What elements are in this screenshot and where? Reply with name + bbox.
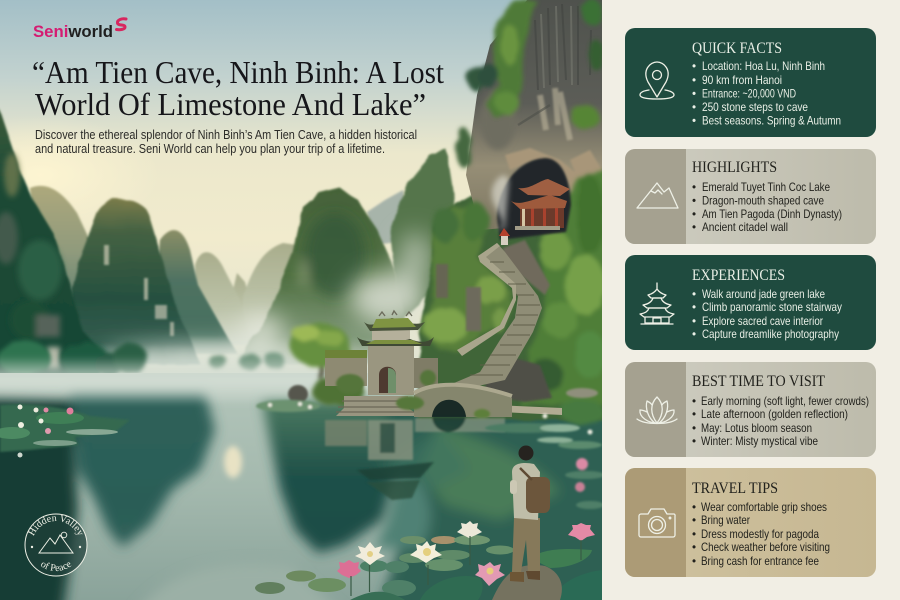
list: experiences: •	[692, 328, 696, 341]
list: quick facts	[692, 60, 841, 128]
list: best time to visit: •	[692, 395, 696, 408]
small shrine and smoke	[492, 175, 510, 245]
panel: best time to visit	[625, 362, 876, 457]
list: experiences: Explore sacred cave interior	[702, 315, 823, 328]
list: highlights: Dragon-mouth shaped cave	[702, 194, 824, 208]
winding stone stairway	[447, 243, 542, 386]
list: best time to visit: •	[692, 435, 696, 448]
list: travel tips: Dress modestly for pagoda	[701, 528, 819, 541]
list: travel tips: •	[692, 514, 696, 527]
list: quick facts: Entrance: ~20,000 VND	[702, 88, 796, 100]
list: best time to visit: •	[692, 408, 696, 421]
icon: camera	[639, 509, 675, 537]
list: highlights: •	[692, 221, 696, 234]
lake surface	[0, 373, 418, 600]
list: quick facts: 250 stone steps to cave	[702, 101, 808, 114]
list: travel tips: •	[692, 541, 696, 554]
heading: travel tips: TRAVEL TIPS	[692, 480, 778, 497]
shore foliage and tree left of gate	[290, 323, 364, 406]
list: experiences	[692, 288, 842, 341]
rock and lily pads near gate	[256, 385, 320, 412]
shore trees	[0, 340, 284, 378]
list: quick facts: •	[692, 114, 696, 128]
large foreground leaves	[350, 570, 602, 600]
panel: travel tips	[625, 468, 876, 577]
valley mist	[105, 232, 431, 371]
lotus flowers	[337, 521, 595, 596]
heading: best time to visit: BEST TIME TO VISIT	[692, 373, 825, 390]
list: highlights	[692, 181, 842, 234]
panel: highlights	[625, 149, 876, 244]
ancient citadel gate	[357, 311, 434, 395]
icon: mountains	[637, 183, 678, 208]
mirrored bridge and gate	[325, 417, 505, 500]
list: experiences: •	[692, 315, 696, 328]
mountain shading	[300, 213, 365, 297]
list: highlights: Am Tien Pagoda (Dinh Dynasty)	[702, 208, 842, 221]
next mountain	[150, 230, 238, 354]
list: experiences: Climb panoramic stone stairway	[702, 301, 842, 314]
main karst peak	[70, 199, 200, 364]
title line two: World Of Limestone And Lake”	[35, 86, 426, 122]
behind-right mountain	[390, 150, 455, 320]
list: best time to visit: Winter: Misty mystical vibe	[701, 435, 818, 448]
heading: highlights: HIGHLIGHTS	[692, 159, 777, 176]
hillside foliage	[420, 167, 610, 424]
list: best time to visit	[692, 395, 869, 448]
list: travel tips: Check weather before visiting	[701, 541, 830, 554]
list: highlights: Ancient citadel wall	[702, 221, 788, 234]
list: travel tips: •	[692, 501, 696, 514]
list: quick facts: •	[692, 88, 696, 100]
intro text: Discover the ethereal splendor of Ninh Binh’s Am Tien Cave, a hidden historical	[35, 128, 417, 142]
intro text line two: and natural treasure. Seni World can help you plan your trip of a lifetime.	[35, 142, 385, 156]
list: quick facts: •	[692, 101, 696, 114]
background paper panel	[600, 0, 900, 600]
list: travel tips: •	[692, 555, 696, 568]
cliff rock texture	[482, 4, 602, 192]
limestone cliff	[466, 0, 610, 230]
list: travel tips: Wear comfortable grip shoes	[701, 501, 827, 514]
icon: map pin	[640, 62, 674, 99]
list: highlights: •	[692, 181, 696, 194]
cave pagoda	[511, 179, 570, 230]
badge: Hidden Valley of Peace: of Peace	[41, 562, 72, 572]
left shore lily pads and flowers	[0, 404, 130, 458]
list: best time to visit: Late afternoon (golden reflection)	[701, 408, 848, 421]
lake reflections	[0, 392, 620, 600]
cliff-top foliage	[456, 0, 604, 168]
lily pads	[255, 535, 592, 596]
list: quick facts: Location: Hoa Lu, Ninh Binh	[702, 60, 825, 73]
heading: experiences: EXPERIENCES	[692, 267, 785, 284]
list: experiences: •	[692, 301, 696, 314]
traveller with backpack	[510, 446, 550, 582]
panel: experiences	[625, 255, 876, 350]
heading: quick facts: QUICK FACTS	[692, 40, 782, 57]
horizon mist	[0, 356, 430, 406]
list: quick facts: •	[692, 60, 696, 73]
right karst mountain	[238, 188, 405, 364]
list: highlights: •	[692, 208, 696, 221]
sun glow	[11, 134, 97, 197]
rock under traveller	[492, 565, 562, 600]
stone walls of gate	[325, 350, 438, 394]
list: best time to visit: Early morning (soft light, fewer crowds)	[701, 395, 869, 408]
logo: Seniworld: Seniworld	[33, 23, 113, 41]
icon: pagoda	[640, 283, 674, 324]
hero landscape photo	[0, 0, 602, 600]
hillside rock faces	[436, 240, 598, 402]
list: travel tips: Bring cash for entrance fee	[701, 555, 819, 568]
karst rock streaks	[104, 245, 174, 336]
list: travel tips: •	[692, 528, 696, 541]
badge: Hidden Valley of Peace: Hidden Valley	[28, 514, 83, 536]
sky	[0, 0, 527, 370]
pale sky reflection	[224, 446, 242, 478]
badge: Hidden Valley of Peace	[24, 514, 88, 576]
arched stone bridge	[396, 385, 512, 419]
icon: lotus	[637, 397, 677, 424]
list: quick facts: 90 km from Hanoi	[702, 74, 782, 87]
shore path	[512, 406, 562, 415]
list: experiences: Walk around jade green lake	[702, 288, 825, 301]
list: highlights: •	[692, 194, 696, 208]
list: quick facts: •	[692, 74, 696, 87]
left cliff details	[0, 153, 62, 369]
cave mouth	[497, 158, 571, 240]
distant pale mountains	[30, 186, 412, 345]
list: best time to visit: May: Lotus bloom season	[701, 422, 812, 435]
title: “Am Tien Cave, Ninh Binh: A Lost	[32, 54, 444, 90]
list: travel tips	[692, 501, 830, 568]
list: quick facts: Best seasons. Spring & Autumn	[702, 114, 841, 128]
list: best time to visit: •	[692, 422, 696, 435]
list: travel tips: Bring water	[701, 514, 750, 527]
list: highlights: Emerald Tuyet Tinh Coc Lake	[702, 181, 830, 194]
stone stairs at water	[336, 396, 420, 416]
left dark cliff	[0, 108, 94, 373]
hillside base	[416, 194, 602, 422]
logo: Seniworld	[33, 19, 126, 41]
list: experiences: •	[692, 288, 696, 301]
list: experiences: Capture dreamlike photography	[702, 328, 839, 341]
panel: quick facts	[625, 28, 876, 137]
lily pads by right shore	[485, 414, 605, 509]
